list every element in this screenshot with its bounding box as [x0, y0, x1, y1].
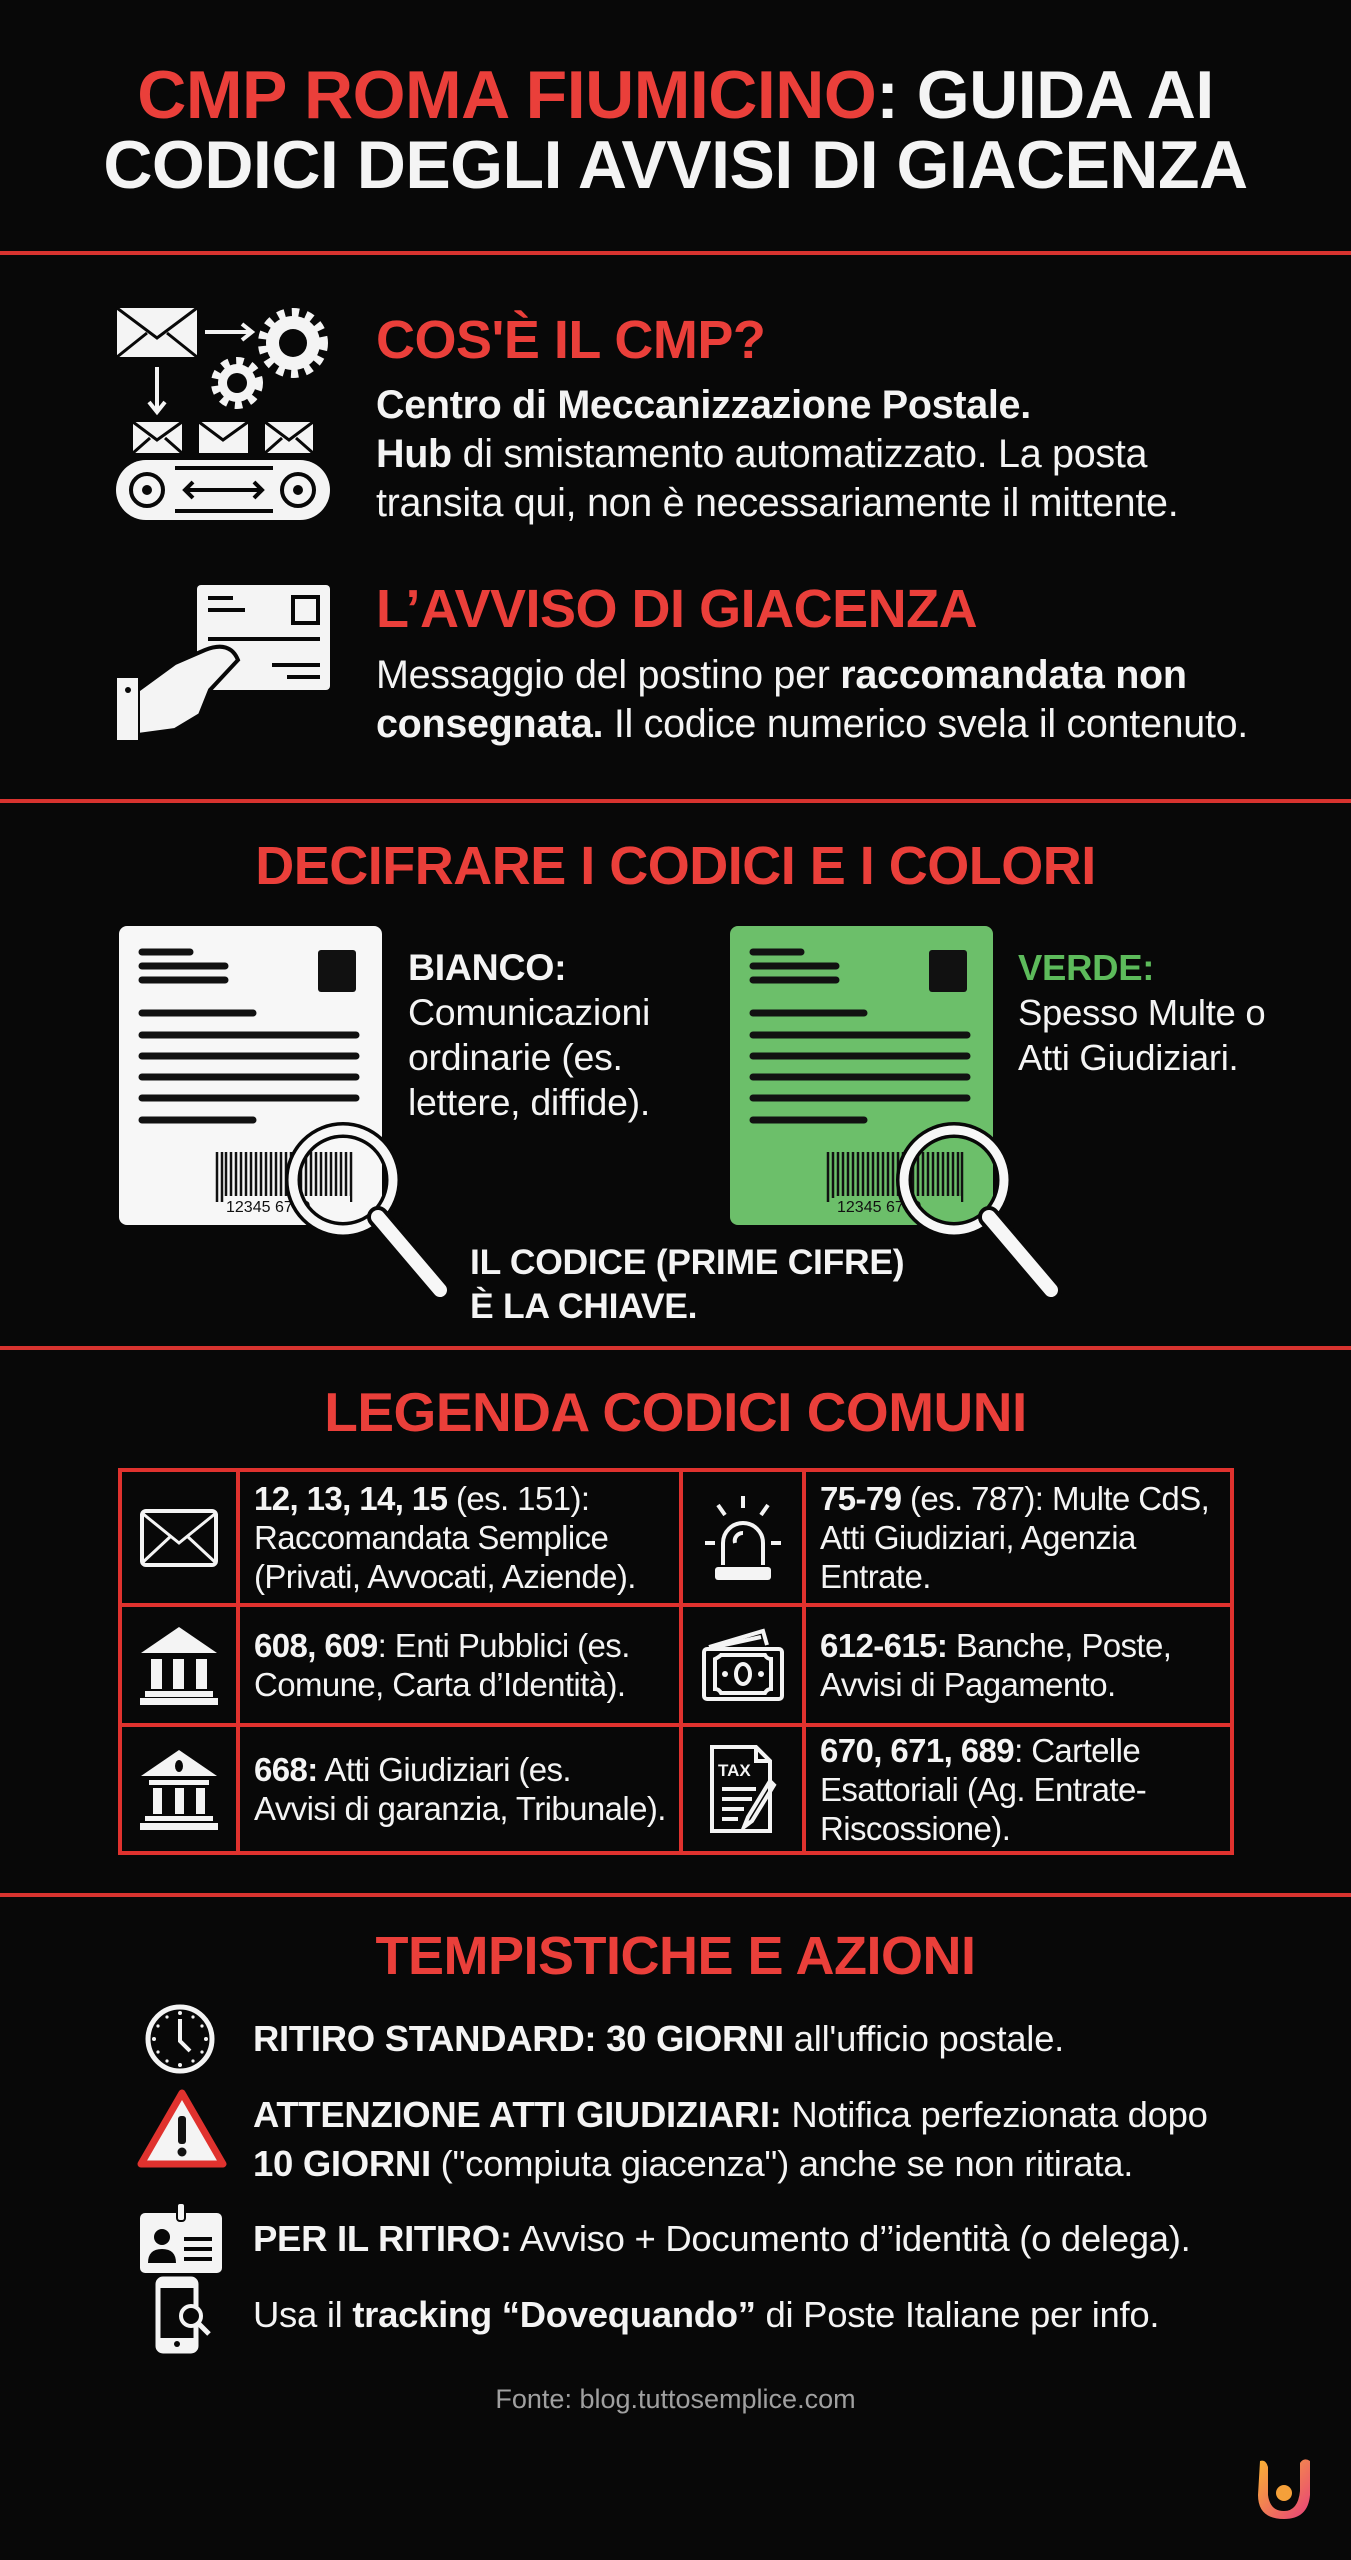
text: bianco: Comunicazioni [408, 991, 650, 1033]
cell: 668 [254, 1751, 666, 1827]
cell: 12-15: (Privati, Avvocati, Aziende). [254, 1558, 636, 1595]
cell: 668: 668: Atti Giudiziari (es. [254, 1751, 571, 1788]
icon: tax document [710, 1745, 776, 1833]
text: bianco: ordinarie (es. [408, 1036, 623, 1078]
icon: phone tracking [156, 2276, 211, 2354]
callout: il codice è la chiave [470, 1242, 904, 1326]
text: attenzione atti giudiziari: ATTENZIONE ATTI GIUDIZIARI: Notifica perfezionata dopo [253, 2094, 1208, 2135]
illustration: white notice card: 12345 6789 [226, 1199, 311, 1216]
callout: il codice è la chiave: È LA CHIAVE. [470, 1286, 697, 1326]
text: verde: Spesso Multe o [1018, 992, 1265, 1033]
text: bianco [408, 946, 650, 1123]
heading: legenda: LEGENDA CODICI COMUNI [324, 1381, 1027, 1443]
cell: 75-79: Atti Giudiziari, Agenzia [820, 1519, 1136, 1556]
cell: 612-615: Avvisi di Pagamento. [820, 1666, 1116, 1703]
cell: 75-79 [820, 1480, 1209, 1595]
title [103, 57, 1248, 203]
text: attenzione atti giudiziari [253, 2094, 1208, 2184]
illustration: green notice card: 12345 6789 [837, 1199, 922, 1216]
heading: tempistiche: TEMPISTICHE E AZIONI [375, 1926, 976, 1986]
icon: bank [140, 1627, 218, 1705]
illustration: green notice card [730, 926, 1058, 1297]
cell: 608 609: 608, 609: Enti Pubblici (es. [254, 1627, 630, 1664]
text: per il ritiro: PER IL RITIRO: Avviso + Documento d’’identità (o delega). [253, 2218, 1190, 2259]
text: verde: VERDE: [1018, 947, 1154, 988]
cell: 670 671 689: Esattoriali (Ag. Entrate- [820, 1770, 1146, 1808]
heading: l'avviso di giacenza: L’AVVISO DI GIACENZA [376, 579, 977, 639]
icon: hand holding notice [117, 585, 330, 740]
cell: 670 671 689: 670, 671, 689: Cartelle [820, 1732, 1140, 1768]
text: verde: Atti Giudiziari. [1018, 1037, 1238, 1078]
text: cmp description: Centro di Meccanizzazione Postale. [376, 383, 1031, 427]
cell: 670 671 689: Riscossione). [820, 1810, 1010, 1846]
cell: 668: Avvisi di garanzia, Tribunale). [254, 1790, 666, 1827]
table: legenda codici [118, 1468, 1234, 1855]
text: avviso description: consegnata. Il codice numerico svela il contenuto. [376, 702, 1248, 746]
icon: money [702, 1628, 784, 1701]
icon: court [140, 1750, 218, 1830]
callout: il codice è la chiave: IL CODICE (PRIME CIFRE) [470, 1242, 904, 1282]
text: ritiro standard: RITIRO STANDARD: 30 GIORNI all'ufficio postale. [253, 2018, 1064, 2059]
icon: clock [146, 2004, 214, 2074]
icon: siren [705, 1496, 781, 1580]
text: cmp description [376, 383, 1178, 525]
cell: 612-615 [820, 1627, 1171, 1703]
cell: 670 671 689 [820, 1732, 1146, 1847]
text: tracking: Usa il tracking “Dovequando” di Poste Italiane per info. [253, 2294, 1159, 2335]
cell: 12-15: 12, 13, 14, 15 (es. 151): [254, 1480, 589, 1517]
cell: 608 609 [254, 1627, 630, 1703]
icon: envelope [140, 1509, 218, 1567]
icon: warning [138, 2090, 226, 2168]
text: attenzione atti giudiziari: 10 GIORNI ("compiuta giacenza") anche se non ritirata. [253, 2143, 1133, 2184]
cell: 75-79: 75-79 (es. 787): Multe CdS, [820, 1480, 1209, 1517]
illustration: white notice card [119, 926, 447, 1297]
icon: id card [140, 2204, 222, 2273]
icon: tax document: TAX [718, 1761, 751, 1780]
source: Fonte: blog.tuttosemplice.com [495, 2384, 856, 2414]
cell: 12-15: Raccomandata Semplice [254, 1519, 608, 1556]
text: cmp description: Hub di smistamento automatizzato. La posta [376, 432, 1147, 476]
heading: decifrare: DECIFRARE I CODICI E I COLORI [255, 836, 1096, 896]
cell: 608 609: Comune, Carta d’Identità). [254, 1666, 625, 1703]
cell: 75-79: Entrate. [820, 1558, 931, 1595]
cell: 612-615: 612-615: Banche, Poste, [820, 1627, 1171, 1664]
text: avviso description: Messaggio del postino per raccomandata non [376, 653, 1187, 697]
text: verde [1018, 947, 1265, 1078]
text: bianco: BIANCO: [408, 946, 566, 988]
cell: 12-15 [254, 1480, 636, 1595]
text: bianco: lettere, diffide). [408, 1081, 650, 1123]
text: avviso description [376, 653, 1248, 746]
title: CODICI DEGLI AVVISI DI GIACENZA [103, 127, 1248, 203]
text: cmp description: transita qui, non è necessariamente il mittente. [376, 481, 1178, 525]
logo [1258, 2459, 1310, 2519]
title: CMP ROMA FIUMICINO: GUIDA AI [137, 57, 1214, 133]
heading: cos'è il cmp: COS'È IL CMP? [376, 310, 765, 370]
icon: postal sorting machine [116, 308, 330, 520]
